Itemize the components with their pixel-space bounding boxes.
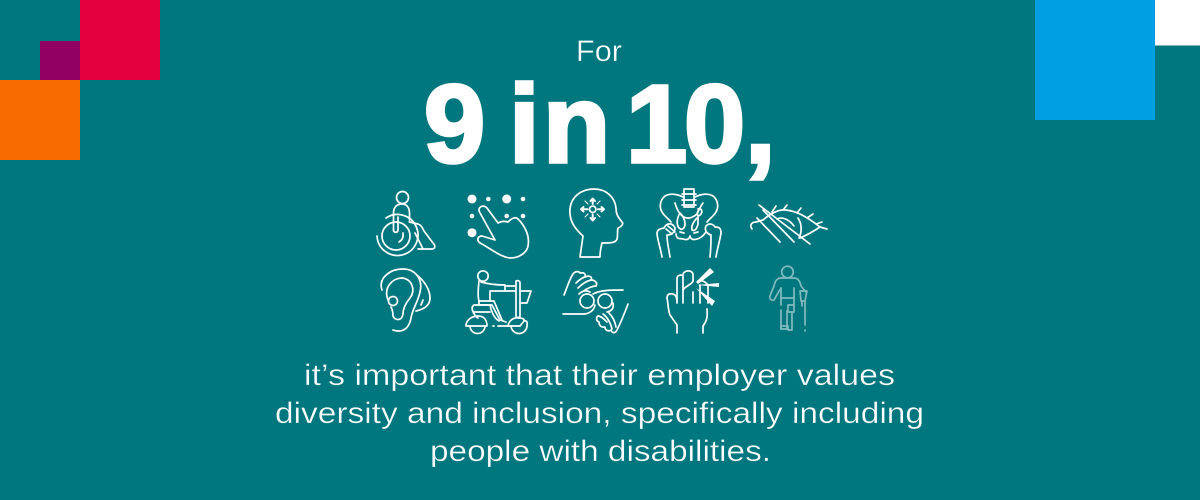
intro word: For xyxy=(576,35,622,68)
icon: person with prosthetic leg and crutch (faded) xyxy=(770,266,807,331)
body text: it’s important that their employer values xyxy=(304,359,895,392)
headline statistic: 9 in 10, xyxy=(0,63,776,186)
body text xyxy=(275,359,924,468)
icon: pelvis and spine xyxy=(657,189,721,257)
decorative squares: top left xyxy=(0,0,160,160)
body text: diversity and inclusion, specifically including xyxy=(275,397,924,430)
icon: head with brain arrows xyxy=(570,189,623,257)
icon: hand on braille dots xyxy=(468,194,528,258)
icon: ear with hearing aid xyxy=(381,269,430,331)
decorative squares: top right xyxy=(1035,0,1200,120)
icon: wheelchair xyxy=(377,192,435,255)
icon: crossed eye xyxy=(751,205,827,244)
icon: hand with pain arrows xyxy=(667,268,719,333)
icon: mobility scooter xyxy=(466,271,531,334)
icon: sign language hands xyxy=(563,272,628,333)
body text: people with disabilities. xyxy=(430,435,771,468)
